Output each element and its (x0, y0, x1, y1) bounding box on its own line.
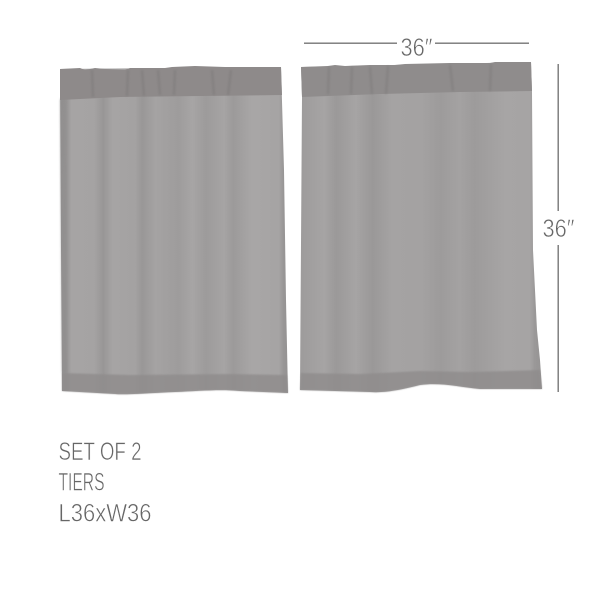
left curtain rod pocket band (60, 66, 282, 100)
panel: left curtain (60, 66, 288, 394)
left curtain side hem (60, 99, 67, 373)
right curtain band folds (328, 64, 491, 94)
left curtain body (60, 67, 288, 394)
width label: 36″ (400, 34, 433, 62)
width line left (304, 42, 397, 44)
height label: 36″ (542, 215, 575, 243)
height line bottom (558, 245, 559, 392)
left curtain bottom hem (62, 373, 288, 394)
right curtain body (300, 62, 542, 392)
product details text (58, 438, 152, 528)
set count: SET OF 2 (58, 438, 142, 466)
panel: right curtain (300, 62, 542, 392)
height line top (558, 64, 559, 211)
right curtain bottom hem (300, 370, 542, 392)
right curtain rod pocket band (301, 62, 532, 97)
product type: TIERS (58, 468, 104, 496)
left curtain band folds (92, 70, 231, 97)
width line right (435, 42, 529, 44)
size: L36xW36 (58, 500, 152, 528)
